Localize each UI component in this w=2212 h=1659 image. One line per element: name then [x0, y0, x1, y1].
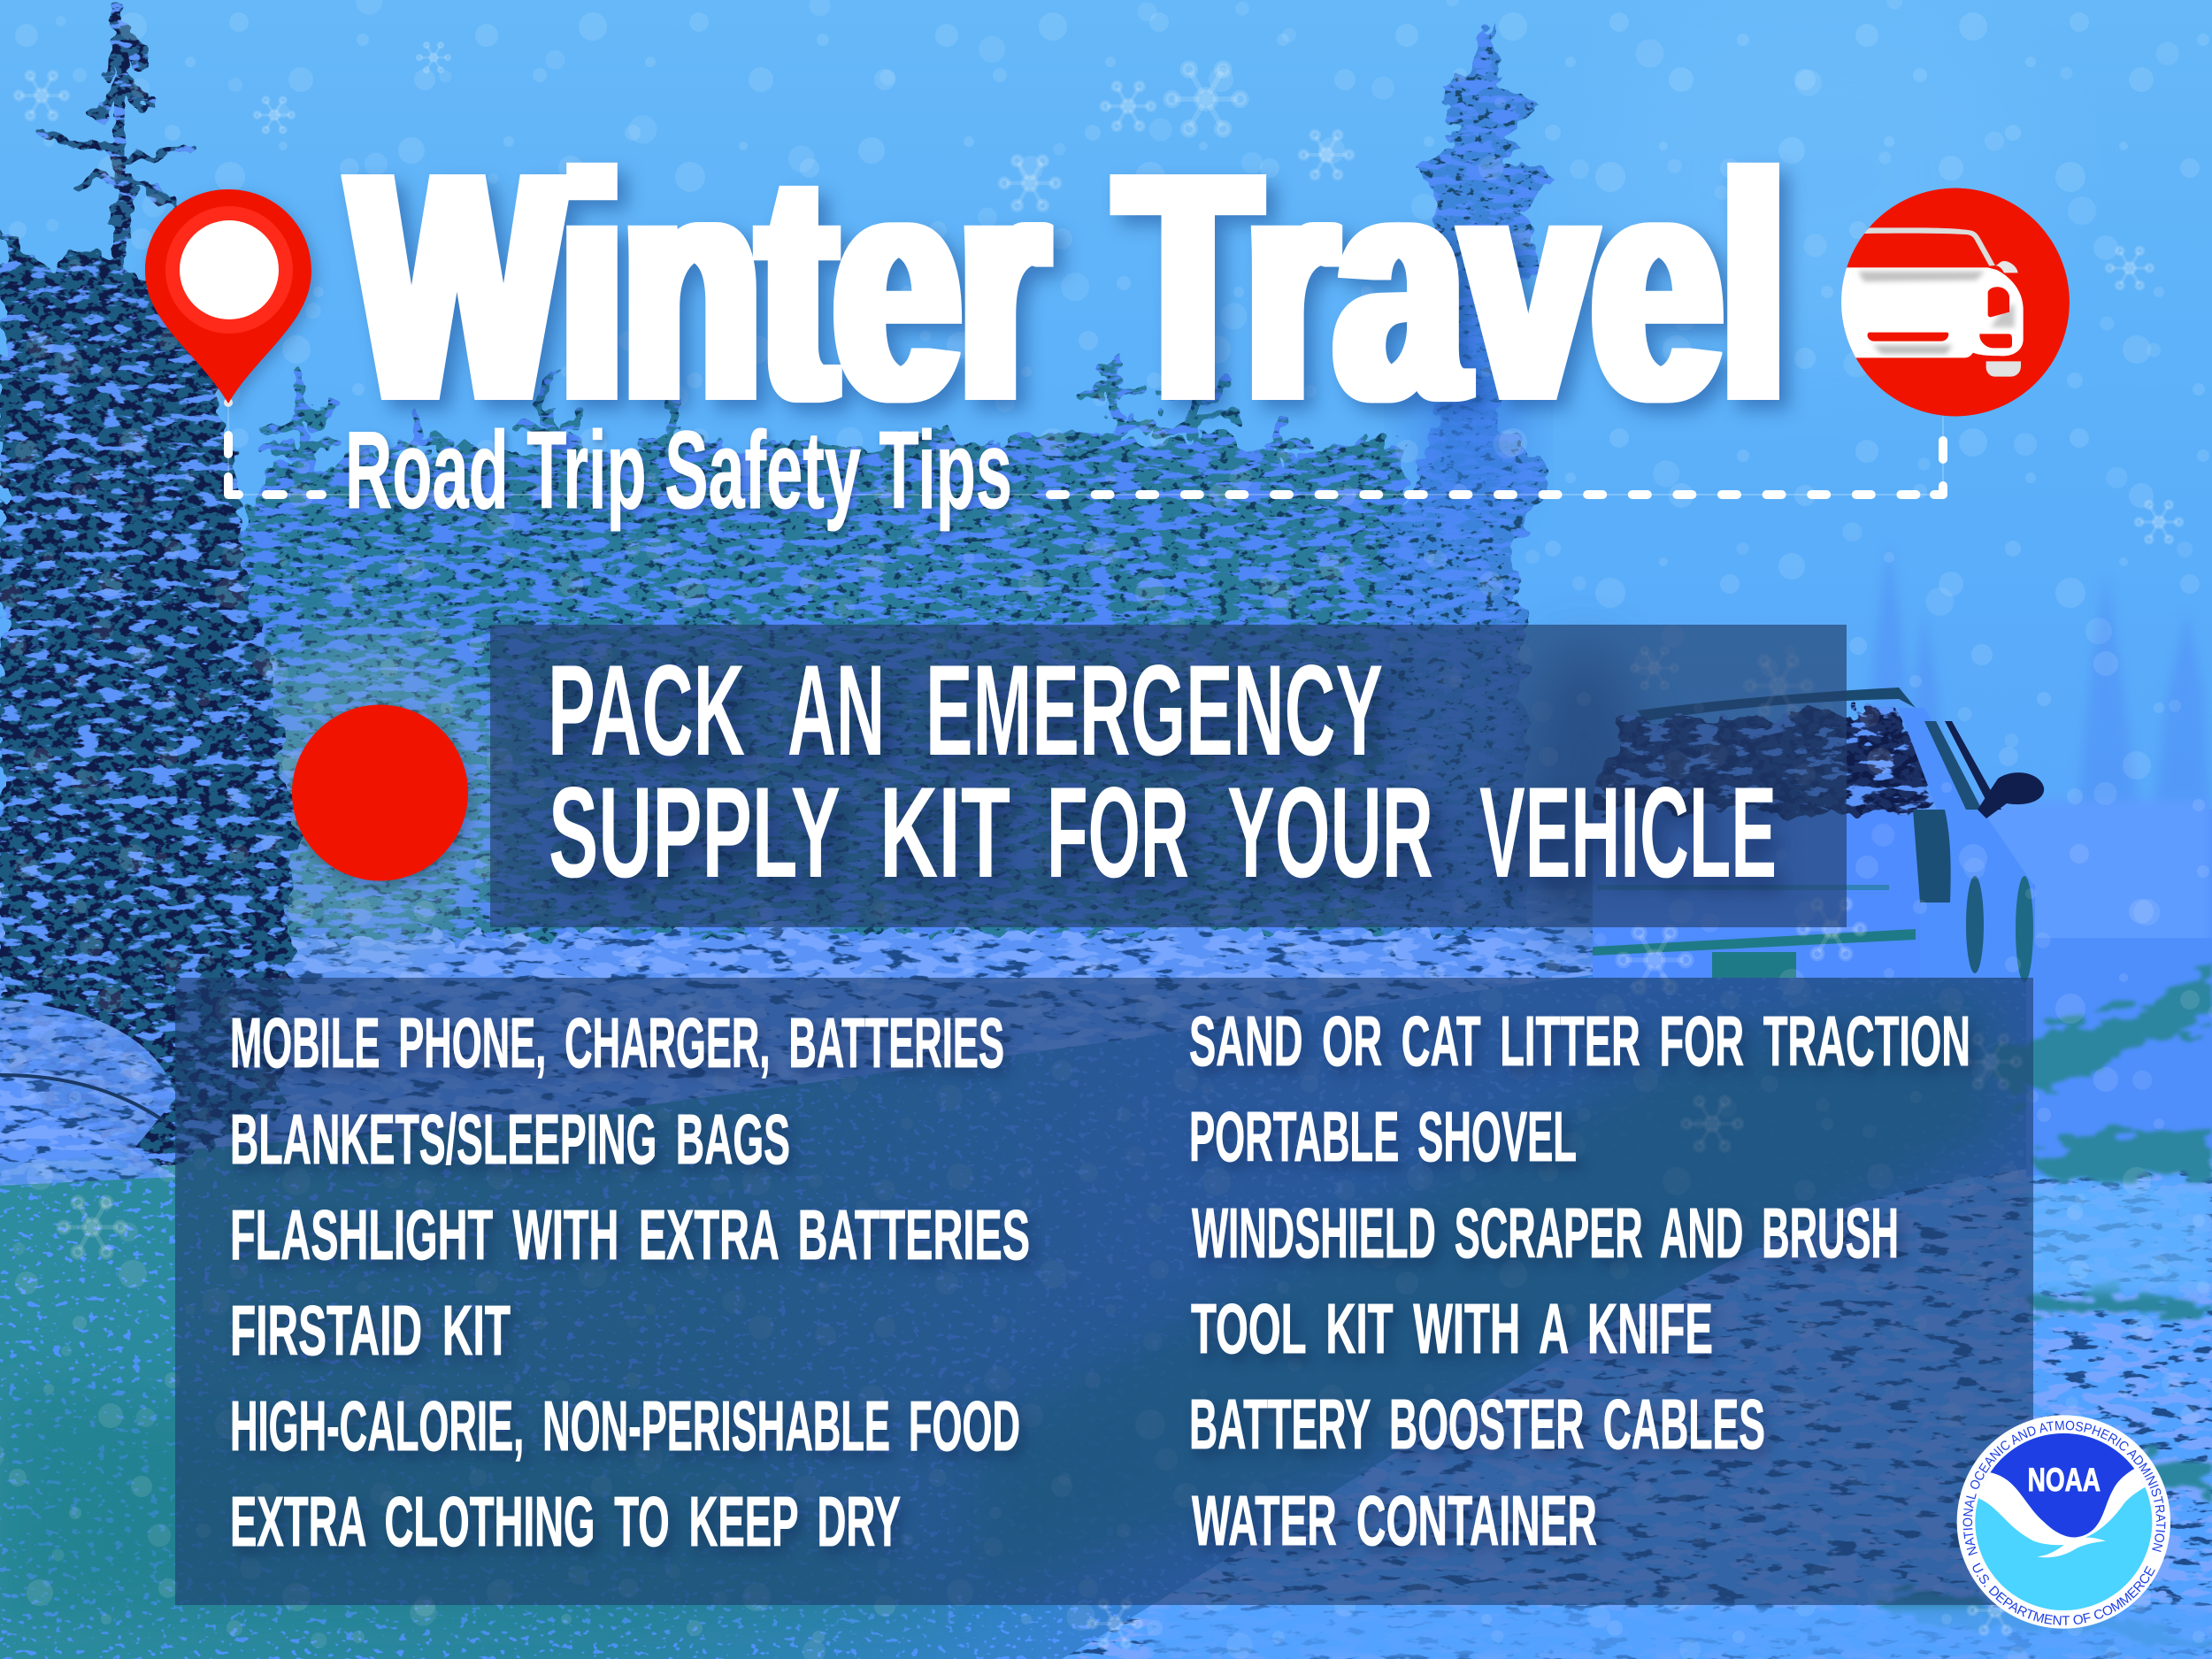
logo ring text: U.S. DEPARTMENT OF COMMERCE: [1973, 1563, 2155, 1625]
list: left column: EXTRA CLOTHING TO KEEP DRY: [230, 1482, 901, 1561]
list: left column: FIRSTAID KIT: [230, 1291, 511, 1370]
snow patch at left: [0, 1000, 177, 1186]
mid tree mass: [212, 425, 1416, 938]
dark blurred edge beside panel: [1522, 646, 1646, 947]
title: winter travel: [351, 107, 1786, 465]
heading: pack an emergency supply kit: KIT: [879, 760, 1010, 904]
logo ring text: NATIONAL OCEANIC AND ATMOSPHERIC ADMINISTRATION: [1962, 1421, 2166, 1555]
lower teal ground: [0, 938, 2035, 1659]
icon: location pin: [145, 189, 311, 407]
heading: pack an emergency supply kit: [548, 638, 1777, 904]
left tree spire: [40, 9, 186, 265]
icon: red circle marker: [292, 704, 468, 881]
heading: pack an emergency supply kit: FOR: [1047, 760, 1189, 904]
heading: pack an emergency supply kit: PACK: [548, 638, 745, 782]
list: right column: TOOL KIT WITH A KNIFE: [1191, 1289, 1713, 1368]
snow bands: [1876, 964, 2212, 1647]
heading: pack an emergency supply kit: YOUR: [1227, 760, 1433, 904]
list: right column: PORTABLE SHOVEL: [1189, 1097, 1577, 1176]
small spruce tree tops: [265, 327, 1380, 495]
parked suv: [1591, 687, 2044, 982]
snowy ground: [0, 810, 2212, 1659]
noaa wordmark: NOAA: [2028, 1462, 2101, 1498]
noaa bird: [1970, 1448, 2148, 1557]
pale foggy snowy branches: [239, 628, 504, 964]
title: winter travel: Winter: [351, 107, 1047, 465]
logo ring text: [1962, 1421, 2166, 1625]
snow bank on right: [1062, 1150, 2212, 1659]
panel: emergency kit heading box: [490, 625, 1847, 927]
icon: car in red circle: [1829, 188, 2070, 416]
heading: pack an emergency supply kit: AN: [787, 638, 885, 782]
subtitle: road trip safety tips: Road Trip Safety Tips: [345, 410, 1012, 532]
heading: pack an emergency supply kit: VEHICLE: [1479, 760, 1777, 904]
left large tree: [0, 230, 292, 1177]
list: left column: [230, 1003, 1030, 1561]
list: right column: [1189, 1002, 1970, 1560]
list: left column: HIGH-CALORIE, NON-PERISHABLE FOOD: [230, 1386, 1020, 1465]
heading: pack an emergency supply kit: SUPPLY: [549, 760, 841, 904]
list: left column: MOBILE PHONE, CHARGER, BATTERIES: [230, 1003, 1004, 1082]
list: left column: FLASHLIGHT WITH EXTRA BATTERIES: [230, 1195, 1030, 1274]
list: right column: WATER CONTAINER: [1192, 1481, 1597, 1560]
heading: pack an emergency supply kit: EMERGENCY: [926, 638, 1383, 782]
list: left column: BLANKETS/SLEEPING BAGS: [230, 1100, 790, 1179]
title: winter travel: Travel: [1118, 107, 1786, 465]
distant faint trees: [1856, 540, 2212, 841]
tall center tree: [1380, 19, 1553, 929]
panel: supply checklist: [175, 978, 2033, 1605]
logo: noaa: [1957, 1415, 2170, 1629]
route: dashed line from pin to car: [228, 405, 1943, 495]
behind the v blur: [1416, 319, 1522, 513]
list: right column: BATTERY BOOSTER CABLES: [1189, 1385, 1765, 1463]
